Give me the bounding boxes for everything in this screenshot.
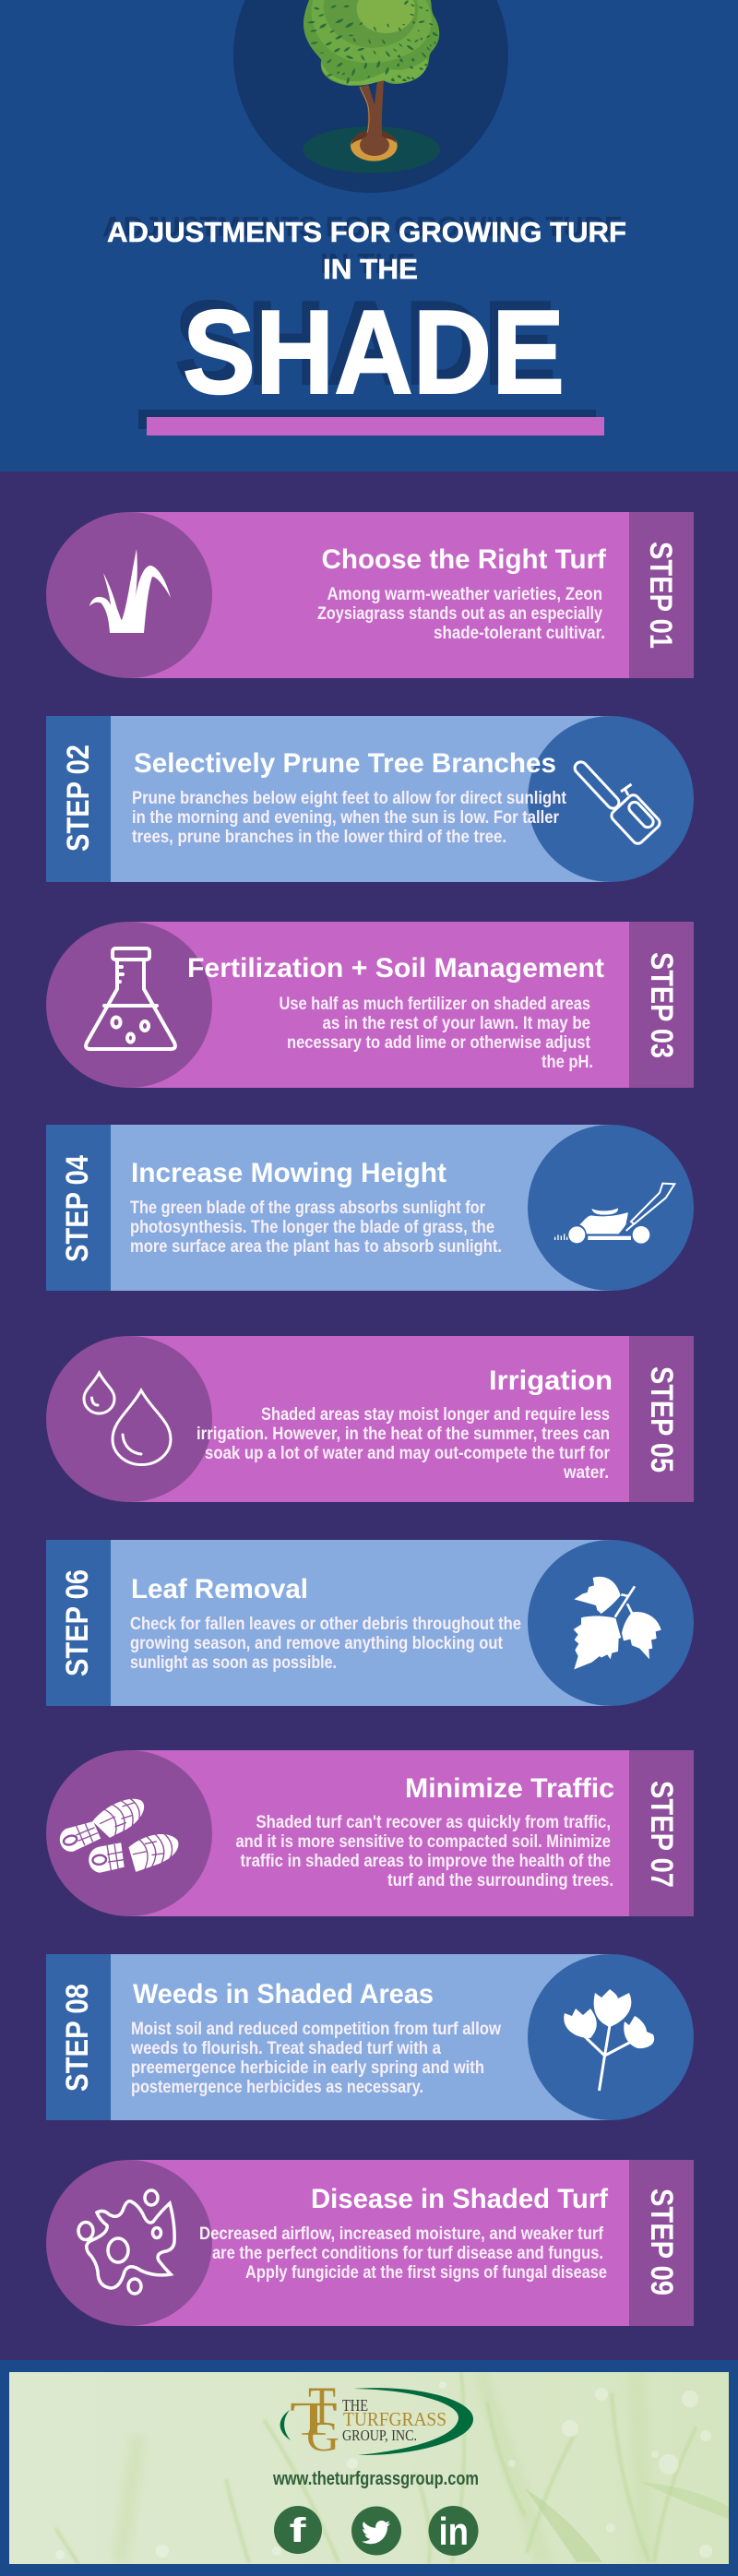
body text: in the morning and evening, when the sun is low. For taller [132,808,560,828]
website url: www.theturfgrassgroup.com [272,2468,479,2489]
title: SHADE: SHADE [174,277,556,410]
body text: and it is more sensitive to compacted soil. Minimize [236,1832,611,1852]
body text: soak up a lot of water and may out-compete the turf for [205,1444,611,1463]
icon: leaves [574,1577,661,1669]
body text [130,1615,521,1673]
footer panel [0,2360,738,2576]
body text [317,585,605,643]
heading: Irrigation [489,1366,613,1396]
step label: STEP 05 [644,1366,679,1473]
icon: water drops [84,1373,171,1465]
icon: facebook [274,2506,322,2554]
heading: Selectively Prune Tree Branches [134,748,556,779]
body text: water. [563,1463,609,1483]
icon: grass [89,549,171,633]
body text: preemergence herbicide in early spring and with [131,2058,484,2078]
icon: linkedin: in [439,2510,469,2553]
body text: are the perfect conditions for turf disease and fungus. [212,2244,603,2263]
step label: STEP 04 [60,1155,95,1262]
icon: tree in dark circle [233,0,508,193]
step label: STEP 08 [60,1984,95,2092]
title: SHADE: SHADE [183,286,565,419]
body text [279,995,593,1072]
body text: weeds to flourish. Treat shaded turf with a [130,2039,441,2058]
body text: trees, prune branches in the lower third of the tree. [132,828,506,847]
panel: step 07 [46,1750,694,1916]
heading: Fertilization + Soil Management [187,953,604,984]
heading: Disease in Shaded Turf [311,2184,609,2214]
body text [236,1813,613,1890]
footer grass photo background [9,2372,729,2564]
step label: STEP 06 [60,1569,95,1676]
body text [132,789,567,847]
step label: STEP 09 [644,2188,679,2296]
body text: shade-tolerant cultivar. [434,624,605,643]
panel: step 02 [46,716,694,882]
body text: growing season, and remove anything blocking out [130,1634,504,1653]
step label: STEP 03 [644,952,679,1058]
body text: traffic in shaded areas to improve the health of the [240,1852,611,1871]
step label: STEP 07 [644,1781,679,1888]
body text: postemergence herbicides as necessary. [131,2078,423,2097]
body text: turf and the surrounding trees. [387,1871,613,1890]
icon: chainsaw [572,759,662,846]
body text: Shaded areas stay moist longer and require less [261,1405,610,1425]
body text: photosynthesis. The longer the blade of grass, the [130,1218,494,1237]
body text [199,2224,607,2283]
panel: step 05 [46,1336,694,1502]
step label: STEP 01 [643,542,678,649]
logo: The Turfgrass Group, Inc.: T [308,2376,336,2437]
body text [130,2020,501,2097]
logo: The Turfgrass Group, Inc.: TURFGRASS [343,2408,446,2430]
body text: Moist soil and reduced competition from turf allow [131,2020,501,2039]
body text: sunlight as soon as possible. [130,1653,337,1673]
title underline bar [138,410,604,435]
icon: facebook: f [290,2511,306,2549]
icon: footprints [56,1790,183,1874]
logo: The Turfgrass Group, Inc.: THE [342,2396,368,2415]
body text: Shaded turf can't recover as quickly from traffic, [256,1813,611,1832]
body text: The green blade of the grass absorbs sunlight for [130,1199,486,1218]
body text: Check for fallen leaves or other debris throughout the [130,1615,521,1634]
body text [130,1199,502,1257]
title line 1: ADJUSTMENTS FOR GROWING TURF [102,210,622,243]
body text: Apply fungicide at the first signs of fungal disease [245,2263,607,2283]
panel: step 03 [46,922,694,1088]
step label: STEP 02 [61,745,96,852]
body text: Prune branches below eight feet to allow for direct sunlight [132,789,567,808]
body text: Decreased airflow, increased moisture, and weaker turf [199,2224,604,2244]
icon: linkedin [428,2506,478,2556]
body text: as in the rest of your lawn. It may be [323,1014,590,1033]
logo: The Turfgrass Group, Inc.: G [306,2413,339,2460]
panel: step 06 [46,1540,694,1706]
heading: Leaf Removal [131,1574,308,1604]
logo: The Turfgrass Group, Inc. [280,2376,473,2460]
body text: more surface area the plant has to absorb sunlight. [130,1237,502,1257]
body text: the pH. [542,1053,593,1072]
body text [196,1405,611,1483]
body text: irrigation. However, in the heat of the summer, trees can [196,1425,610,1444]
body text: Zoysiagrass stands out as an especially [317,604,602,624]
icon: weed flowers [564,1989,654,2091]
icon: flask [86,948,175,1049]
title line 2: IN THE [323,253,418,285]
body text: necessary to add lime or otherwise adjust [287,1033,591,1053]
heading: Weeds in Shaded Areas [133,1979,434,2010]
panel: step 04 [46,1125,694,1291]
header panel [0,0,738,471]
icon: twitter [351,2506,401,2556]
icon: lawn mower [555,1184,674,1244]
icon: disease cell [78,2190,174,2294]
heading: Choose the Right Turf [321,544,607,575]
panel: step 01 [46,512,694,678]
logo: The Turfgrass Group, Inc.: T [290,2393,338,2446]
panel: step 09 [46,2160,694,2326]
title line 1: ADJUSTMENTS FOR GROWING TURF [107,216,626,248]
body text: Use half as much fertilizer on shaded areas [279,995,590,1014]
heading: Minimize Traffic [405,1773,614,1804]
panel: step 08 [46,1954,694,2120]
logo: The Turfgrass Group, Inc.: GROUP, INC. [342,2427,417,2444]
title line 2: IN THE [320,247,415,280]
body text: Among warm-weather varieties, Zeon [327,585,602,604]
heading: Increase Mowing Height [131,1158,446,1188]
